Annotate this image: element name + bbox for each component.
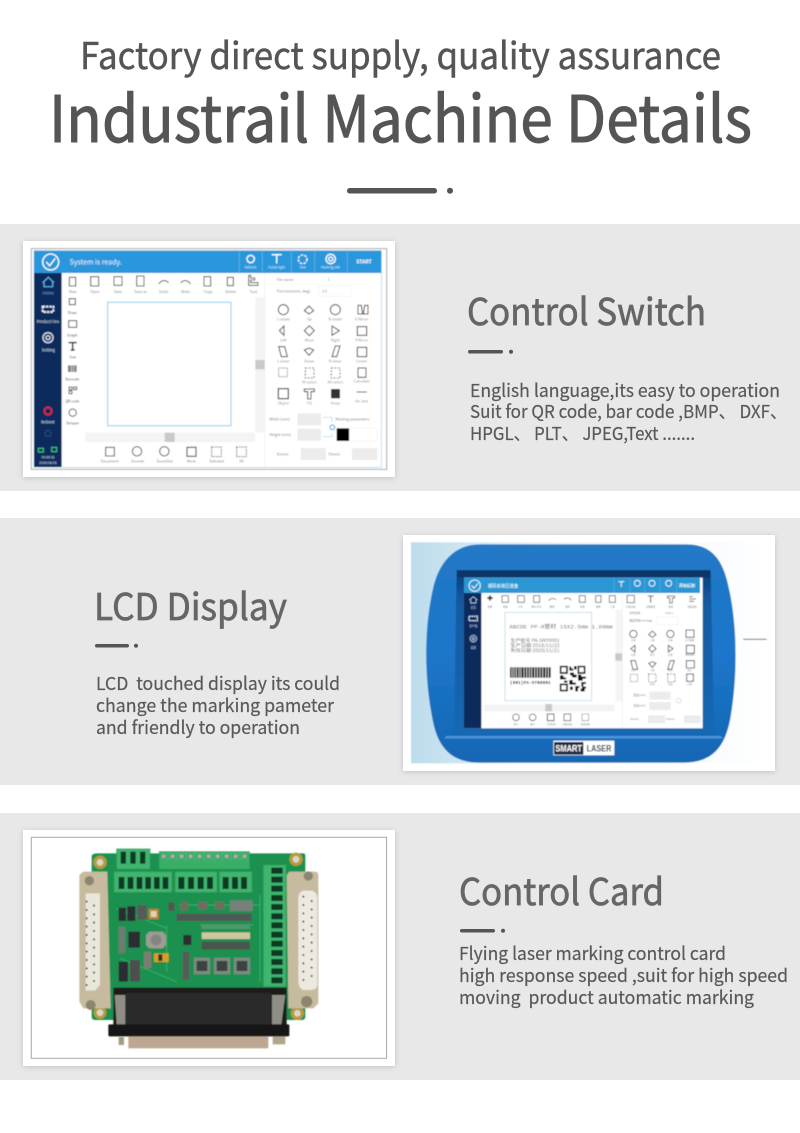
lcd device image: 计算 [687,682,693,686]
description: Flying laser marking control card [459,940,726,966]
lcd device image: X(mm): [630,717,639,721]
touch screen interface image: Work [187,460,196,465]
touch screen interface image: Width (mm): [269,418,291,423]
lcd device image: 左移 [631,653,636,657]
chips [194,958,250,974]
canvas [108,302,231,426]
lcd device image: 垂直镜像 [685,653,695,657]
touch screen interface image: All-select [328,380,344,385]
lcd device image: 多选 [650,682,655,686]
lcd device image: 文件名称: [629,611,641,615]
description: LCD touched display its could [96,670,340,696]
touch screen interface image: System is ready. [70,258,122,268]
touch screen interface image: Refresh [245,265,257,270]
screen [464,578,703,728]
lcd device image: 保存/另存 [531,604,542,608]
touch screen interface image: R-rotate [329,317,342,322]
lcd device image: 生成文档 [626,604,636,608]
touch screen interface image: R-shear [329,360,342,365]
lcd device image: 全选 [668,682,673,686]
touch screen interface image: M-select [302,380,317,385]
touch screen interface image: Object [278,402,290,407]
touch screen interface image: New [69,290,77,295]
touch screen interface image: Setting [42,347,56,353]
lcd device image: 新建 [488,604,493,608]
lcd device image: 开始标刻 [679,582,695,589]
touch screen interface image: ZoomIn [131,460,144,465]
touch screen interface image: Left [280,338,287,343]
touch screen interface image: Draw [68,311,77,316]
touch screen interface image: Product line [37,319,60,325]
touch screen interface image: Up [307,317,313,322]
touch screen interface image: QR code [65,399,79,404]
touch screen interface image: Delayer [66,422,80,427]
inductor [146,932,166,948]
touch screen interface image: Arc text [355,400,369,405]
lcd device image: 宽度(mm): [633,693,646,697]
lcd device image: 模码系统已准备 [488,582,519,589]
touch screen interface image: Document [101,460,119,465]
panel: control card [0,813,800,1080]
lcd device image: 失效日期 2020/11/21 [510,647,560,654]
touch screen interface image: 1.0 [322,289,327,294]
touch screen interface image: Undo [159,290,169,295]
lcd device image: 工具 [610,604,616,608]
label canvas [505,612,592,701]
lcd device image: 放大 [514,722,519,726]
touch screen interface image: 2020/06/05 [39,460,57,465]
touch screen interface image: All [240,460,244,465]
touch screen interface image: Selected [209,460,224,465]
card frame [31,837,387,1058]
lcd device image: 右切 [668,668,673,672]
lcd device image: 工作区域 [546,722,556,726]
lcd device image: 撤销 [550,604,555,608]
scroll bars [615,610,623,702]
lcd device image: (001)PA-SYN0001 [510,681,551,686]
lcd device image: 填充 [669,604,674,608]
touch screen interface image [31,249,387,469]
logo: LASER [587,744,612,754]
heading: control switch: Control Switch [467,282,706,336]
touch screen interface image: Marking info [321,265,340,270]
lcd device image: 下移 [650,668,655,672]
sidebar icons [38,277,57,452]
bottom tools [106,447,246,457]
header [49,26,752,194]
touch screen interface image: Y-Mirror [354,338,369,343]
lcd device image: Untit 1 [665,611,674,615]
touch screen interface image: Fsdslt light [268,265,286,270]
touch screen interface image: Barcode [65,377,79,382]
lcd device image: 左切 [631,668,636,672]
touch screen interface image: L-shear [277,360,290,365]
touch screen interface image: Calculate [354,380,370,385]
dsub connectors [79,871,318,1010]
lcd device image: 高度(mm): [633,704,646,708]
lcd device image: 系统设置 [687,604,697,608]
panel: control switch [0,224,800,491]
touch screen interface image: Center [356,360,368,365]
touch screen interface image: Save as [134,290,147,295]
touch screen interface image: Reboot [41,419,55,425]
lcd device image: 首页 [471,606,476,610]
touch screen interface image: Precision(mm, deg): [277,289,311,294]
touch screen interface image: L-rotate [277,317,290,322]
subtitle: Factory direct supply, quality assurance [80,26,721,80]
components [119,900,253,982]
lcd device image: 右旋 [668,638,673,642]
description: change the marking pameter [96,692,335,718]
description: HPGL、 PLT、 JPEG,Text ....... [470,420,695,446]
divider [460,929,505,933]
lcd device image: 恢复 [565,604,571,608]
lcd device image: 居中 [687,668,693,672]
lcd device image: 居中 [650,653,655,657]
lcd device image: 精度控制(mm,deg): [629,619,653,623]
touch screen interface image: Text [69,355,77,360]
touch screen interface image: Move [305,338,314,343]
lcd device image: 对象区域 [563,722,573,726]
description: moving product automatic marking [459,984,754,1010]
description: and friendly to operation [96,714,300,740]
touch screen interface image: Height (mm): [269,433,292,438]
right control panel [264,273,266,467]
touch screen interface image: Delete [225,290,236,295]
touch screen interface image: Graph [67,333,78,338]
touch screen interface image: Copy [204,290,213,295]
lcd device image: 新建 [503,604,508,608]
touch screen interface image: ZoomOut [157,460,173,465]
lcd device image: 上移 [650,638,655,642]
big black connector [113,988,287,1025]
touch screen interface image: START [356,259,372,266]
touch screen interface image: 09:44:35 [42,455,55,460]
board [92,853,305,1020]
lcd device image: 设置 [471,645,476,649]
lcd device image: 水平镜像 [685,638,695,642]
divider [468,350,513,354]
toolbar [487,595,493,601]
qr code [560,666,586,692]
touch screen interface image: Right [331,338,340,343]
touch screen interface image: Y(mm): [327,453,341,458]
touch screen interface image: File name: [277,278,294,283]
lcd device image: 全部对象 [581,722,591,726]
divider [95,644,138,648]
title: Industrail Machine Details [49,69,752,161]
lcd device image: 生产批号 PA-SNY0001 [510,637,560,644]
lcd device image: 复制 [580,604,585,608]
touch screen interface image: Array [331,402,340,407]
touch screen interface image: 1 [328,278,330,283]
lcd device image: ABCDE PP-R管材 15X2.5mm 1.00mm [509,622,613,630]
heading: control card: Control Card [459,862,664,916]
touch screen interface image: Save [114,290,122,295]
description [96,670,340,740]
touch screen interface image: Home [43,291,55,297]
touch screen interface image: Marking parameters [335,418,370,423]
touch screen interface image: Tool [250,290,257,295]
touch screen interface image: Down [304,360,314,365]
title underline [347,188,453,194]
lcd device image: 右移 [668,653,673,657]
touch screen interface image: Fill [307,402,312,407]
lcd device image: 左旋 [631,638,636,642]
lcd device image: 缩小 [530,722,536,726]
description [470,377,787,446]
right panel [621,593,623,728]
lcd device image: Y(mm): [665,717,675,721]
description [459,940,788,1010]
touch screen interface image: X(mm): [277,453,289,458]
panel: lcd display [0,518,800,785]
mounting holes [93,853,304,1020]
lcd device image: 打开 [518,604,524,608]
terminals [114,849,286,987]
description: English language,its easy to operation [470,377,780,403]
lcd device image: 删除 [596,604,601,608]
touch screen interface image: Redo [181,290,191,295]
lcd device image [411,542,767,763]
lcd device image: 对象属性 [646,604,656,608]
logo: SMART [555,744,582,754]
logo [553,741,614,755]
touch screen interface image: Open [90,290,100,295]
touch screen interface image: X-Mirror [355,317,369,322]
description: high response speed ,suit for high speed [459,962,788,988]
touch screen interface image: Test [299,265,307,270]
lcd device image: 生产线 [469,624,478,628]
control card photo [79,849,318,1048]
description: Suit for QR code, bar code ,BMP、 DXF、 [470,398,787,424]
barcode [510,667,551,678]
heading: lcd display: LCD Display [94,577,287,631]
lcd device image: 生产日期 2018/11/22 [510,642,560,649]
toolbar [69,275,258,416]
